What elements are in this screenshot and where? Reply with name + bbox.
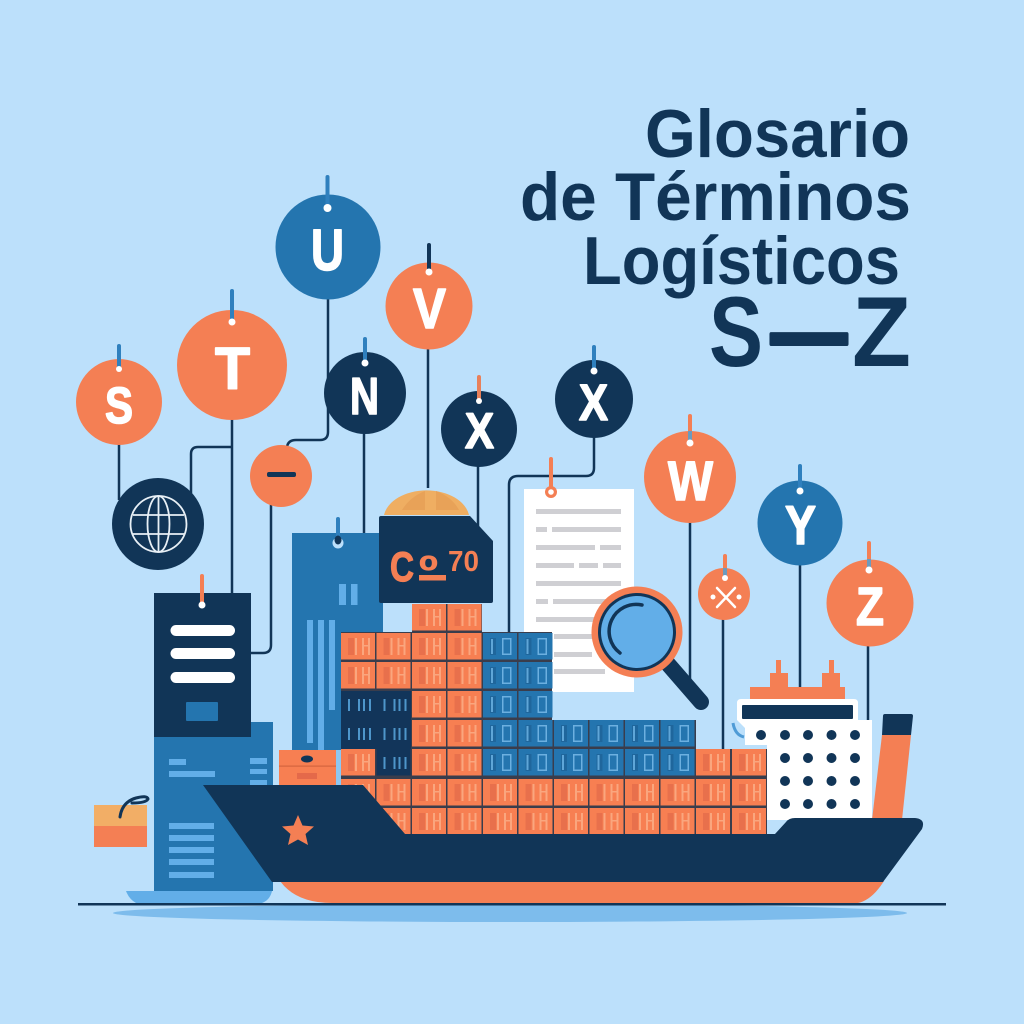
ship superstructure xyxy=(733,660,872,820)
tag Y: Y xyxy=(785,494,816,556)
blue building xyxy=(292,517,383,755)
tag U: U xyxy=(311,218,344,283)
tag X left: X xyxy=(465,403,494,459)
tag N: N xyxy=(350,368,379,426)
row 1 containers xyxy=(412,604,482,630)
tag small cross xyxy=(698,554,750,620)
tag Z xyxy=(826,541,914,646)
title line: Glosario: Glosario xyxy=(645,96,910,172)
row 4 containers xyxy=(341,691,552,749)
shopping bag xyxy=(94,797,148,847)
title line: S—Z: S xyxy=(709,276,763,387)
label text: o xyxy=(419,546,438,576)
tag X right xyxy=(555,345,633,438)
label text xyxy=(390,543,479,590)
ship funnel xyxy=(872,714,913,820)
tag U xyxy=(276,175,380,300)
porthole dots xyxy=(756,730,860,809)
row 6 containers xyxy=(341,749,766,776)
tag V: V xyxy=(413,277,446,341)
navy list tag xyxy=(154,574,251,737)
tag X left xyxy=(441,375,517,467)
tag S xyxy=(76,344,162,445)
title line: de Términos: de Términos xyxy=(520,159,911,235)
row 5 containers xyxy=(341,720,694,746)
tag T xyxy=(177,289,287,420)
tag V xyxy=(386,243,472,350)
tag W: W xyxy=(668,449,713,512)
document page xyxy=(524,457,634,692)
tag Y xyxy=(758,464,842,566)
tag dash xyxy=(250,445,312,507)
label text: C xyxy=(390,543,414,590)
tag S: S xyxy=(105,377,133,434)
orange crate xyxy=(279,750,341,786)
row 8 containers xyxy=(376,808,766,834)
container stack xyxy=(341,604,767,834)
water reflection xyxy=(113,904,907,922)
tag N xyxy=(324,337,406,434)
connector lines xyxy=(119,295,868,752)
icon: globe xyxy=(112,478,204,570)
tag T: T xyxy=(215,336,250,402)
icon: star xyxy=(282,815,314,845)
title line: S—Z: Z xyxy=(852,276,911,387)
row 2 containers xyxy=(341,633,552,660)
magnifying glass xyxy=(592,586,701,702)
blue document xyxy=(126,722,273,903)
title line: S—Z xyxy=(709,276,911,387)
ground line xyxy=(78,903,946,906)
title line: S—Z: — xyxy=(771,276,847,387)
row 7 containers xyxy=(341,779,766,806)
cargo label box xyxy=(379,490,493,603)
ship hull xyxy=(203,785,923,903)
tag X right: X xyxy=(579,374,608,431)
title line: Logísticos: Logísticos xyxy=(583,223,900,299)
row 3 containers xyxy=(341,662,552,688)
label text: 70 xyxy=(448,546,479,578)
tag W xyxy=(644,414,736,523)
tag Z: Z xyxy=(856,577,884,637)
title xyxy=(520,96,911,387)
